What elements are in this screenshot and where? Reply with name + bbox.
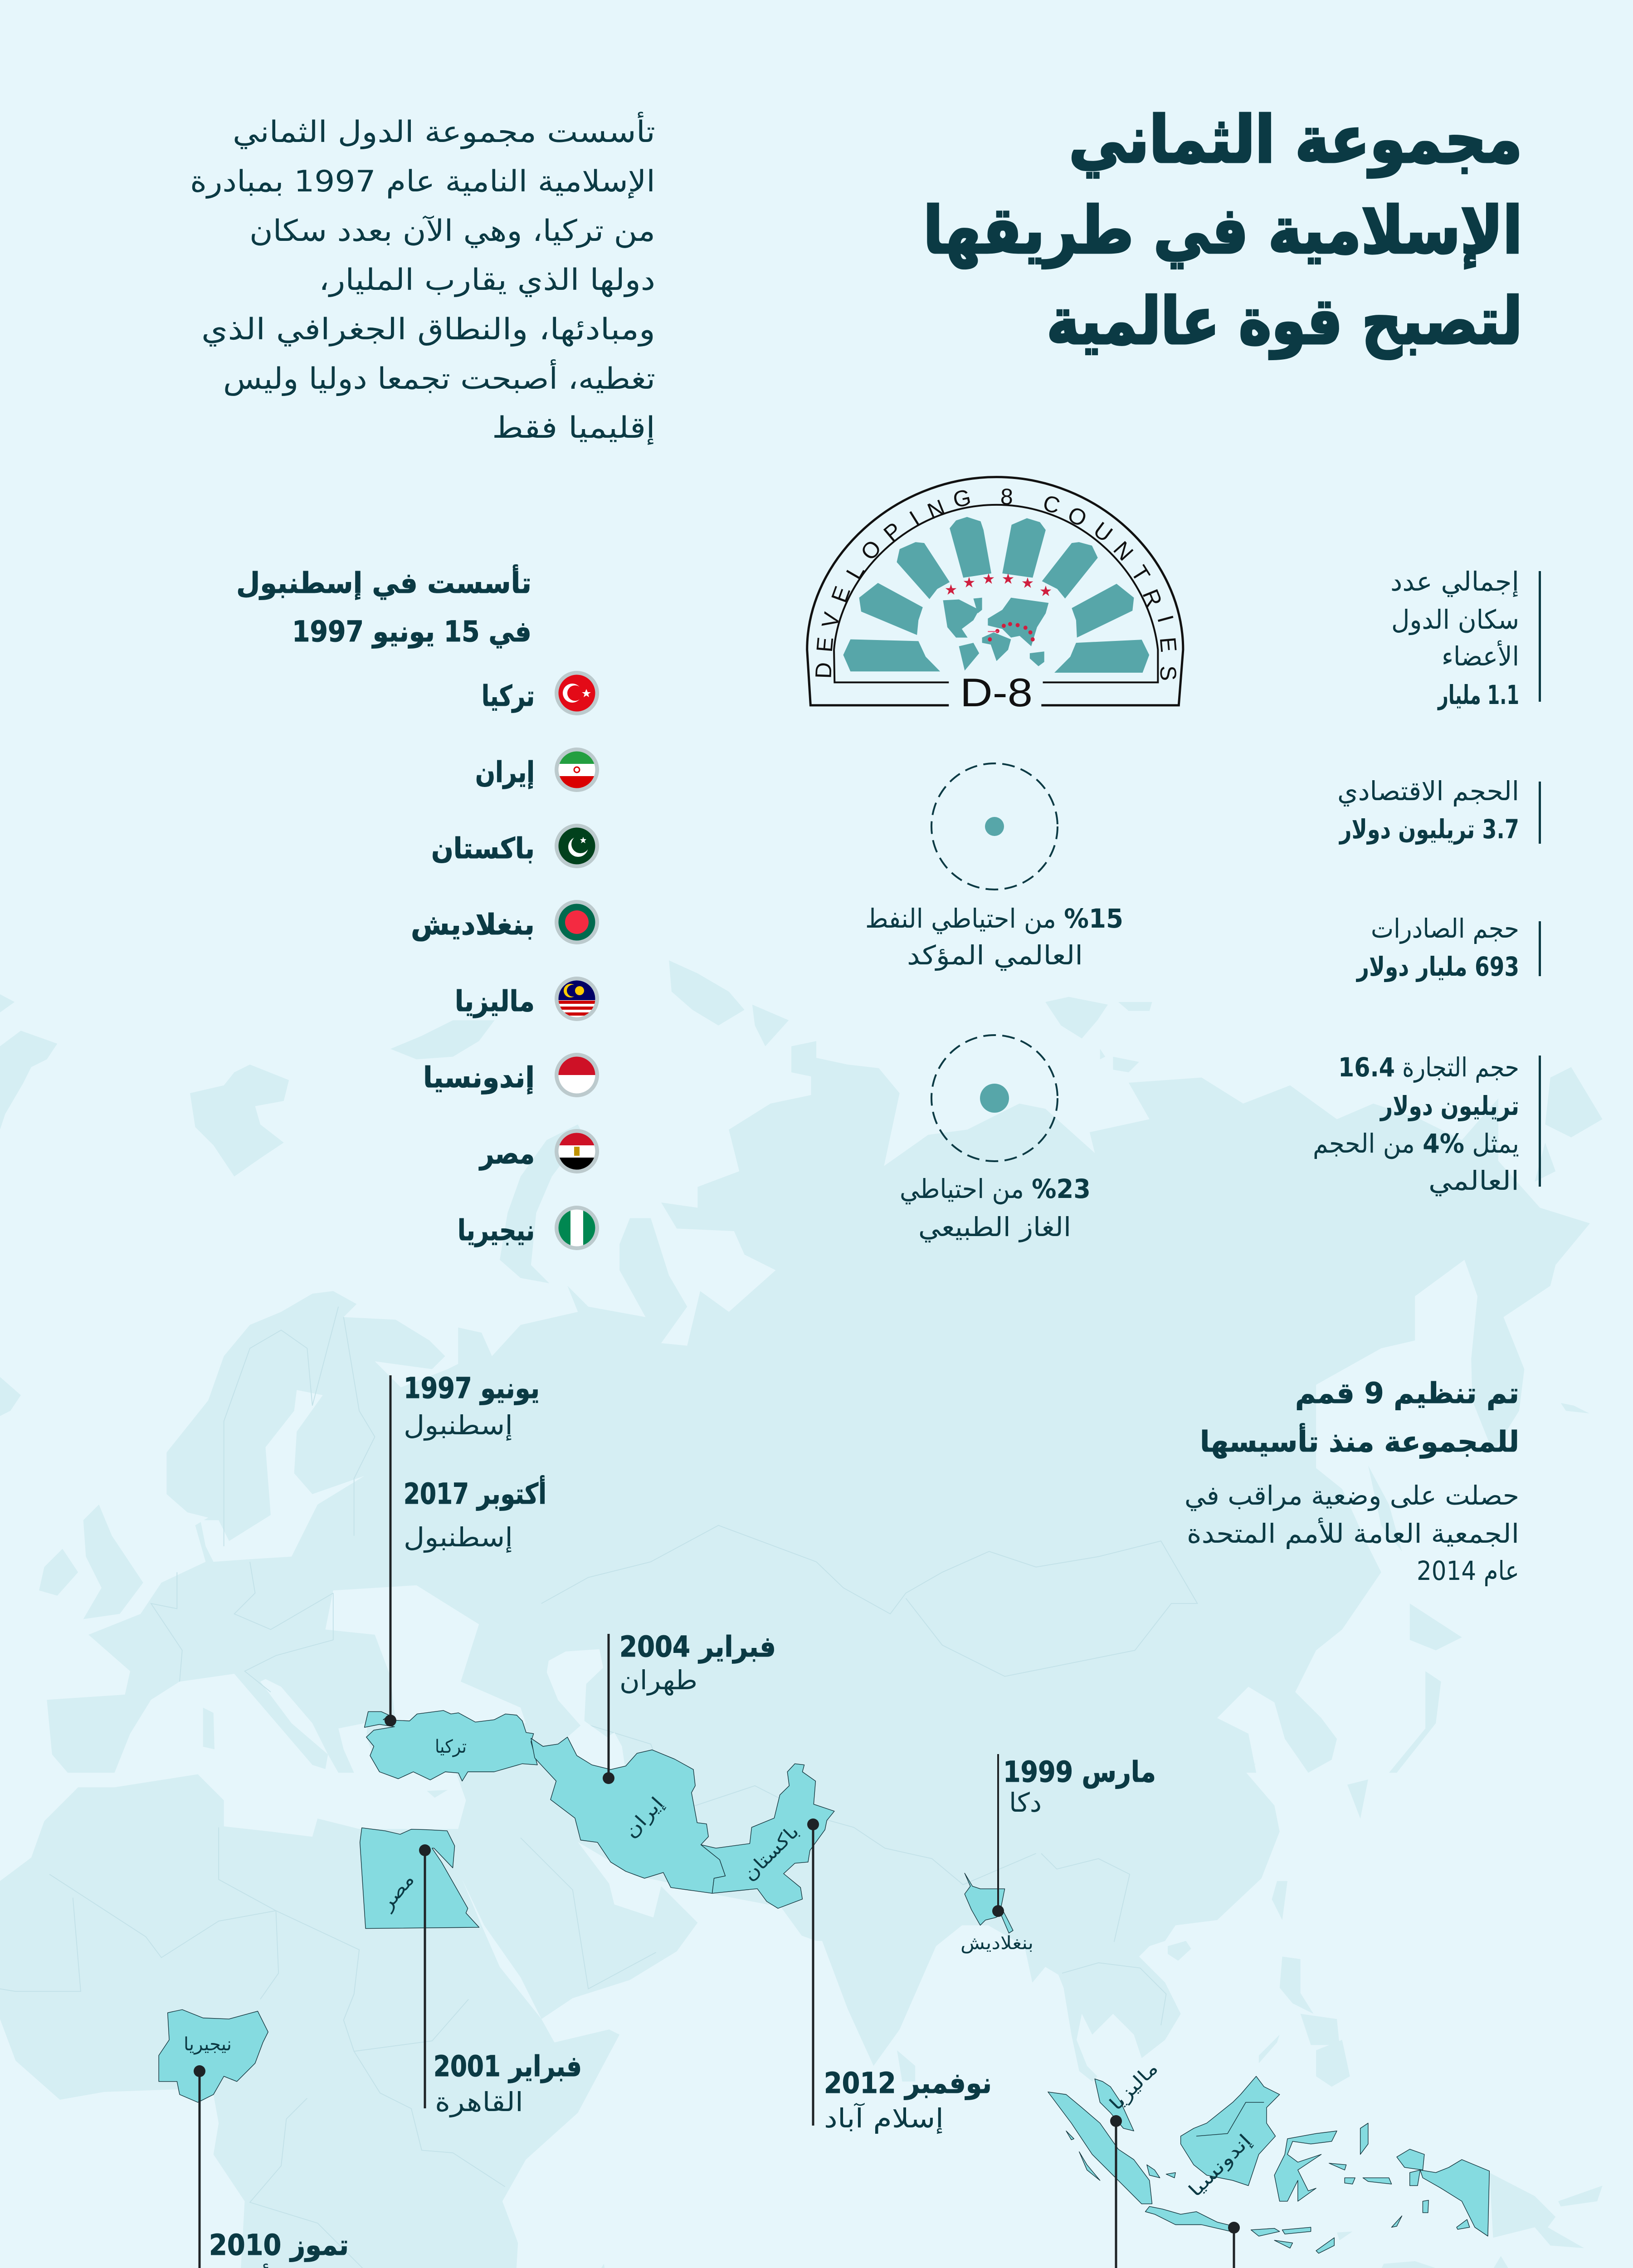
summit: Istanbul: إسطنبول xyxy=(404,1522,513,1553)
stat: exports: حجم الصادرات xyxy=(1371,913,1519,944)
stat: economy xyxy=(1337,776,1541,845)
member: Pakistan xyxy=(431,824,599,868)
intro text block: إقليميا فقط xyxy=(492,411,655,445)
D-8 logo: ★ xyxy=(963,574,975,591)
member: Turkey xyxy=(482,671,599,715)
country map labels: باكستان xyxy=(739,1821,803,1885)
D-8 logo: E xyxy=(812,636,838,653)
D-8 logo: G xyxy=(951,484,973,513)
summit: Cairo: القاهرة xyxy=(435,2087,523,2118)
summits text block: عام 2014 xyxy=(1417,1555,1519,1586)
member: Bangladesh xyxy=(411,900,599,944)
D-8 logo: O xyxy=(1064,501,1091,532)
stat: economy: 3.7 تريليون دولار xyxy=(1339,814,1519,845)
summit: Islamabad: إسلام آباد xyxy=(824,2102,944,2134)
country map labels: إيران xyxy=(620,1793,668,1843)
D-8 logo: T xyxy=(1126,561,1155,586)
stat: population: الأعضاء xyxy=(1442,640,1519,672)
oil reserve circle: العالمي المؤكد xyxy=(907,940,1083,971)
title: الإسلامية في طريقها xyxy=(923,193,1522,269)
founding heading xyxy=(236,564,531,649)
title xyxy=(923,103,1522,359)
summit: Tehran xyxy=(603,1630,776,1784)
D-8 logo: I xyxy=(905,506,924,531)
intro text block: تأسست مجموعة الدول الثماني xyxy=(233,112,655,149)
country map labels: بنغلاديش xyxy=(960,1933,1033,1954)
D-8 logo: O xyxy=(856,535,887,565)
highlighted member countries xyxy=(159,1711,1489,2253)
title: مجموعة الثماني xyxy=(1069,103,1522,178)
summit: Dhaka: دكا xyxy=(1009,1787,1042,1818)
intro text block: دولها الذي يقارب المليار، xyxy=(319,263,655,297)
intro text block: الإسلامية النامية عام 1997 بمبادرة xyxy=(190,165,655,199)
stat: exports xyxy=(1356,913,1541,982)
gas reserve circle: الغاز الطبيعي xyxy=(918,1212,1071,1243)
D-8 logo: 8 xyxy=(1000,484,1014,509)
stat: exports: 693 مليار دولار xyxy=(1356,951,1519,982)
member: Turkey: تركيا xyxy=(482,679,535,713)
D-8 logo: ★ xyxy=(982,571,995,587)
D-8 logo: C xyxy=(1040,490,1063,519)
summits text block: تم تنظيم 9 قمم xyxy=(1295,1377,1519,1410)
summit: Abuja xyxy=(194,2065,349,2268)
member: Malaysia xyxy=(455,977,599,1021)
D-8 logo: ★ xyxy=(945,582,957,598)
world map background xyxy=(0,960,1603,2268)
country map labels: إندونسيا xyxy=(1185,2130,1255,2201)
summit: Dhaka xyxy=(992,1754,1156,1917)
D-8 logo: E xyxy=(1155,636,1181,653)
summit: Kuala Lumpur xyxy=(960,2115,1122,2268)
summit: Tehran: فبراير 2004 xyxy=(619,1630,776,1663)
D-8 logo: ★ xyxy=(1002,571,1014,587)
summits text block xyxy=(1185,1377,1519,1586)
country: Nigeria xyxy=(159,2009,268,2102)
intro text block xyxy=(190,112,655,445)
gas reserve circle xyxy=(900,1035,1091,1243)
summit: Islamabad xyxy=(807,1818,992,2134)
country map labels: تركيا xyxy=(435,1736,467,1757)
D-8 logo: E xyxy=(826,583,855,606)
D-8 logo: N xyxy=(1108,537,1138,566)
member: Iran: إيران xyxy=(475,756,535,789)
country map labels xyxy=(184,1736,1255,2201)
member: Egypt: مصر xyxy=(478,1137,535,1170)
member list with flags xyxy=(411,671,599,1250)
intro text block: تغطيه، أصبحت تجمعا دوليا وليس xyxy=(223,359,655,396)
member: Iran xyxy=(475,748,599,792)
summit: Istanbul: يونيو 1997 xyxy=(404,1372,540,1405)
stat: population xyxy=(1390,566,1541,710)
summit: Istanbul: إسطنبول xyxy=(404,1410,513,1441)
country map labels: مصر xyxy=(375,1869,419,1915)
D-8 logo: D xyxy=(810,662,837,679)
gas reserve circle: %23 من احتياطي xyxy=(900,1173,1091,1205)
country: Turkey, Iran, Pakistan, Egypt xyxy=(360,1711,834,1929)
D-8 logo: D-8 xyxy=(960,670,1033,715)
summits text block: الجمعية العامة للأمم المتحدة xyxy=(1187,1517,1519,1549)
summit: Istanbul: أكتوبر 2017 xyxy=(404,1475,546,1511)
member: Nigeria: نيجيريا xyxy=(458,1214,535,1247)
D-8 logo: R xyxy=(1137,586,1167,611)
D-8 logo: U xyxy=(1089,517,1117,547)
D-8 logo: ★ xyxy=(1039,583,1052,599)
stat: economy: الحجم الاقتصادي xyxy=(1337,776,1519,807)
stat: population: 1.1 مليار xyxy=(1437,679,1519,710)
summit: Islamabad: نوفمبر 2012 xyxy=(824,2067,992,2100)
D-8 logo: L xyxy=(841,560,869,584)
D-8 logo: V xyxy=(817,610,845,630)
summit: Tehran: طهران xyxy=(619,1665,697,1696)
intro text block: من تركيا، وهي الآن بعدد سكان xyxy=(249,214,655,248)
summit: Bali xyxy=(1228,2222,1385,2268)
D-8 logo: S xyxy=(1155,665,1181,681)
D-8 logo xyxy=(807,477,1183,715)
summit: Dhaka: مارس 1999 xyxy=(1003,1755,1156,1789)
stat: trade: العالمي xyxy=(1428,1165,1519,1197)
D-8 logo: P xyxy=(879,518,907,547)
stat: trade: يمثل %4 من الحجم xyxy=(1313,1128,1519,1159)
country: Bangladesh, Malaysia, Indonesia xyxy=(965,1873,1489,2253)
oil reserve circle: %15 من احتياطي النفط xyxy=(865,903,1123,934)
D-8 logo: N xyxy=(924,494,949,524)
country map labels: ماليزيا xyxy=(1106,2058,1162,2115)
summit: Istanbul xyxy=(385,1372,546,1726)
member: Malaysia: ماليزيا xyxy=(455,985,535,1018)
member: Bangladesh: بنغلاديش xyxy=(411,908,535,941)
stat: trade: حجم التجارة 16.4 xyxy=(1338,1052,1519,1083)
stat: trade: تريليون دولار xyxy=(1380,1090,1519,1122)
oil reserve circle xyxy=(865,763,1123,971)
member: Indonesia: إندونسيا xyxy=(423,1061,535,1095)
founding heading: تأسست في إسطنبول xyxy=(236,564,531,600)
summit: Cairo: فبراير 2001 xyxy=(434,2050,582,2083)
member: Nigeria xyxy=(458,1206,599,1250)
intro text block: ومبادئها، والنطاق الجغرافي الذي xyxy=(201,313,655,347)
member: Indonesia xyxy=(423,1053,599,1097)
summits text block: للمجموعة منذ تأسيسها xyxy=(1200,1423,1519,1459)
summits text block: حصلت على وضعية مراقب في xyxy=(1185,1480,1519,1511)
title: لتصبح قوة عالمية xyxy=(1047,284,1522,359)
summit: Abuja: تموز 2010 xyxy=(209,2229,349,2262)
member: Pakistan: باكستان xyxy=(431,832,535,865)
founding heading: في 15 يونيو 1997 xyxy=(292,615,531,649)
country map labels: نيجيريا xyxy=(184,2034,232,2055)
D-8 logo: ★ xyxy=(1021,575,1034,591)
summit: Cairo xyxy=(419,1844,582,2118)
D-8 logo: I xyxy=(1152,612,1179,625)
stat: population: إجمالي عدد xyxy=(1390,566,1519,597)
stat: population: سكان الدول xyxy=(1391,604,1519,635)
member: Egypt xyxy=(478,1129,599,1173)
stat: trade xyxy=(1313,1052,1541,1197)
